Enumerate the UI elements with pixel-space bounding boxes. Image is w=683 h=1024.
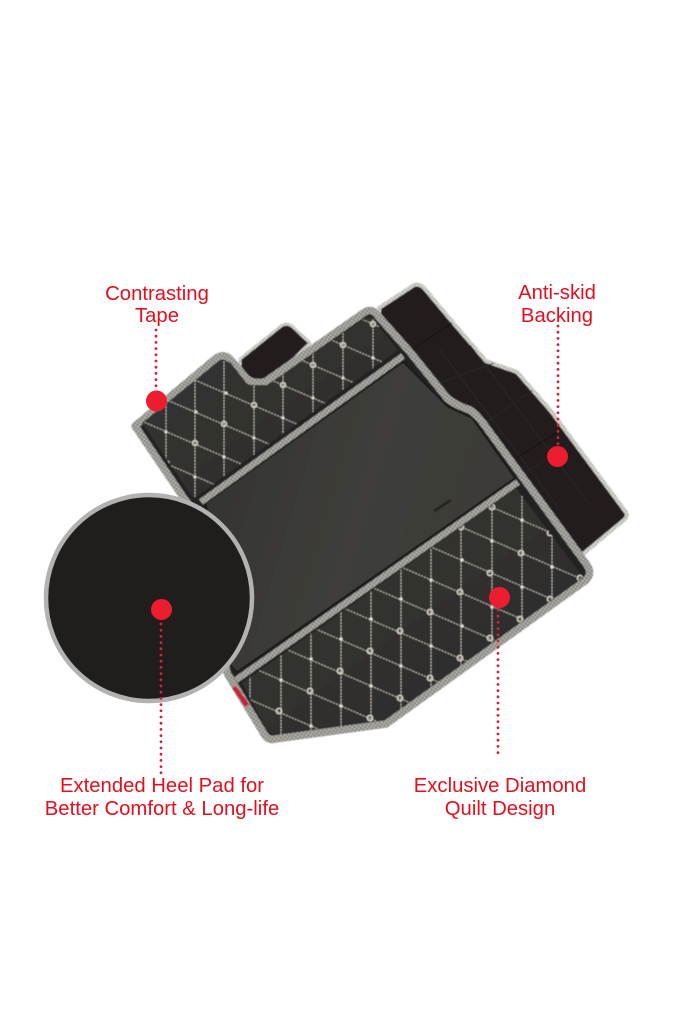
label: exclusive diamond quilt design: Quilt Design xyxy=(445,798,555,820)
label: extended heel pad: Better Comfort & Long-life xyxy=(45,798,279,820)
label: anti-skid backing: Anti-skid xyxy=(518,282,596,304)
lower tape strip xyxy=(236,482,518,680)
label: contrasting tape: Tape xyxy=(135,305,179,327)
leader line: diamond quilt xyxy=(497,610,499,758)
back mat: anti-skid backing xyxy=(379,284,627,554)
floor mat product photo xyxy=(130,282,630,744)
back mat: rear notch section xyxy=(240,324,310,390)
upper tape strip xyxy=(201,356,403,502)
label: contrasting tape: Contrasting xyxy=(105,283,209,305)
marker: contrasting tape xyxy=(146,390,167,412)
label: anti-skid backing: Backing xyxy=(521,305,593,327)
heel pad magnifier circle xyxy=(46,495,252,701)
marker: anti-skid backing xyxy=(547,446,568,467)
red brand tag xyxy=(232,686,249,707)
leader line: anti-skid backing xyxy=(557,326,559,448)
leader line: heel pad xyxy=(160,624,162,773)
lower quilted panel xyxy=(242,488,584,734)
marker: heel pad xyxy=(151,599,172,620)
label: exclusive diamond quilt design: Exclusive Diamond xyxy=(414,775,586,797)
heel pad xyxy=(206,362,515,672)
label: extended heel pad: Extended Heel Pad for xyxy=(60,775,264,797)
leader line: contrasting tape xyxy=(155,330,157,392)
marker: diamond quilt xyxy=(489,587,510,608)
small embossed logo xyxy=(434,500,451,511)
upper quilted panel xyxy=(142,318,397,498)
main mat base with contrasting tape xyxy=(135,310,590,739)
